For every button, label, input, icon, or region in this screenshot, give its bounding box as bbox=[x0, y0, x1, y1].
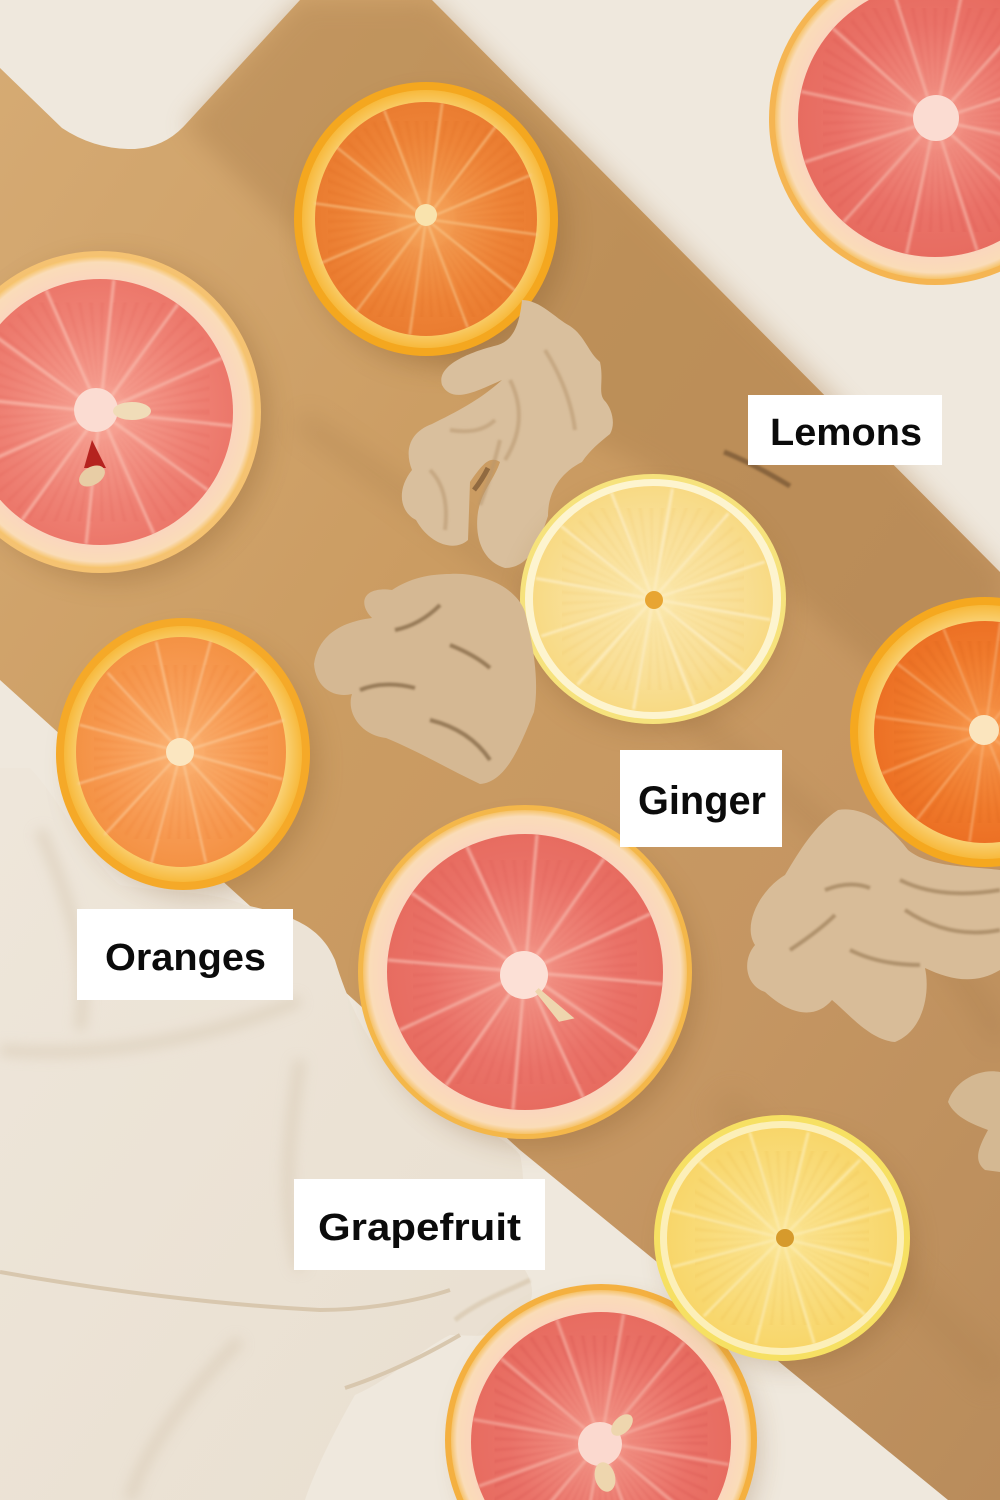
label: Ginger: Ginger bbox=[638, 779, 766, 823]
label: Oranges: Oranges bbox=[105, 937, 266, 979]
label: Ginger bbox=[620, 750, 782, 847]
fruit: top-centre orange bbox=[294, 82, 566, 366]
fruit: lower lemon bbox=[645, 1105, 919, 1371]
fruit: right orange bbox=[850, 597, 1000, 867]
label: Grapefruit bbox=[294, 1179, 545, 1270]
label: Grapefruit: Grapefruit bbox=[318, 1207, 521, 1249]
fruit: bottom grapefruit bbox=[445, 1284, 758, 1500]
ginger: middle root bbox=[314, 574, 536, 784]
ginger: small piece at right edge bbox=[948, 1071, 1000, 1172]
fruit: centre grapefruit bbox=[358, 805, 695, 1145]
fruit: centre lemon bbox=[516, 468, 790, 730]
towel: linen cloth bbox=[0, 768, 532, 1500]
label: Lemons: Lemons bbox=[770, 412, 922, 454]
ginger: right root bbox=[747, 809, 1000, 1042]
label: Lemons bbox=[748, 395, 942, 465]
fruit: left grapefruit bbox=[0, 251, 267, 580]
fruit: left orange bbox=[50, 614, 316, 896]
fruit: top-right grapefruit bbox=[769, 0, 1000, 285]
ginger: upper root bbox=[402, 300, 613, 568]
label: Oranges bbox=[77, 909, 293, 1000]
